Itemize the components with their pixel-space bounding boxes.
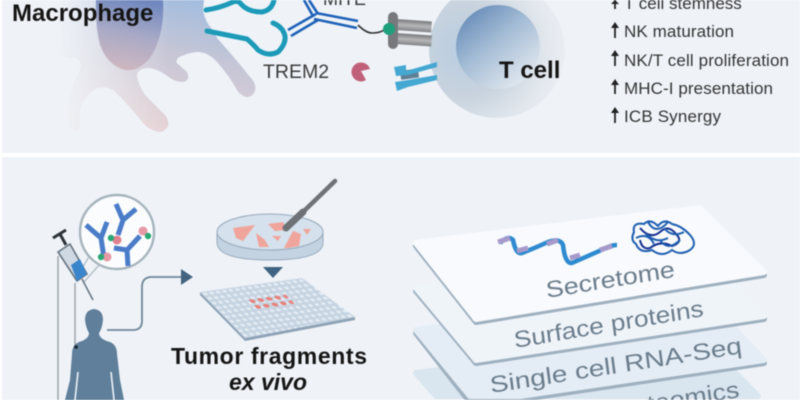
icon: pink protein — [351, 62, 370, 81]
layer text: Surface proteins — [512, 297, 705, 354]
macrophage nucleus — [96, 0, 163, 70]
panel: bottom workflow — [2, 157, 800, 400]
petri dish — [217, 214, 323, 260]
antibody 2 — [116, 204, 136, 235]
well plate — [200, 278, 355, 341]
item: ICB Synergy: ICB Synergy — [624, 107, 722, 126]
outcomes list — [624, 0, 789, 126]
folded protein — [632, 221, 694, 254]
protein ribbon — [498, 238, 617, 263]
layer text: Secretome — [544, 257, 676, 303]
up arrows — [611, 0, 619, 123]
layer: secretome — [416, 208, 764, 322]
payloads — [98, 226, 151, 262]
label: TREM2: TREM2 — [263, 61, 329, 83]
layer: surface proteins — [416, 250, 764, 363]
icon: syringe — [53, 230, 93, 300]
antibody 1 — [86, 222, 107, 258]
item: MHC-I presentation: MHC-I presentation — [624, 79, 773, 98]
macrophage cell — [57, 0, 255, 132]
panel: top mechanism — [2, 0, 800, 153]
antibody 3 — [114, 236, 140, 266]
arrow: to tumor fragments — [107, 269, 193, 330]
label: T cell: T cell — [499, 57, 560, 84]
label: Tumor fragments: Tumor fragments — [171, 343, 367, 369]
gray receptor — [383, 12, 432, 49]
icon: scalpel — [286, 181, 335, 228]
layer: fourth omics — [413, 367, 761, 400]
item: NK maturation: NK maturation — [624, 22, 734, 41]
tumor pieces — [233, 222, 311, 248]
T cell body — [429, 0, 565, 118]
label: Macrophage: Macrophage — [12, 0, 153, 27]
item: NK/T cell proliferation: NK/T cell proliferation — [624, 51, 789, 70]
zoom circle: antibodies — [80, 195, 154, 269]
pink wells — [248, 294, 297, 311]
arrow: dish to plate — [263, 267, 283, 278]
icon: patient silhouette — [65, 309, 124, 400]
sampling lines — [58, 256, 75, 400]
layer text: Single cell RNA-Seq — [488, 334, 743, 398]
tumor site dot — [74, 345, 78, 349]
label: ex vivo: ex vivo — [229, 369, 307, 395]
zoom callout lines — [81, 255, 100, 282]
green ligand — [383, 23, 395, 35]
layer: single cell RNA-Seq — [416, 293, 764, 398]
arm gaps — [75, 372, 114, 400]
antibody — [288, 0, 358, 36]
T cell nucleus — [456, 5, 540, 89]
blue receptor — [394, 62, 437, 91]
receptor: TREM2 hooks — [206, 0, 285, 54]
linker — [358, 25, 384, 33]
